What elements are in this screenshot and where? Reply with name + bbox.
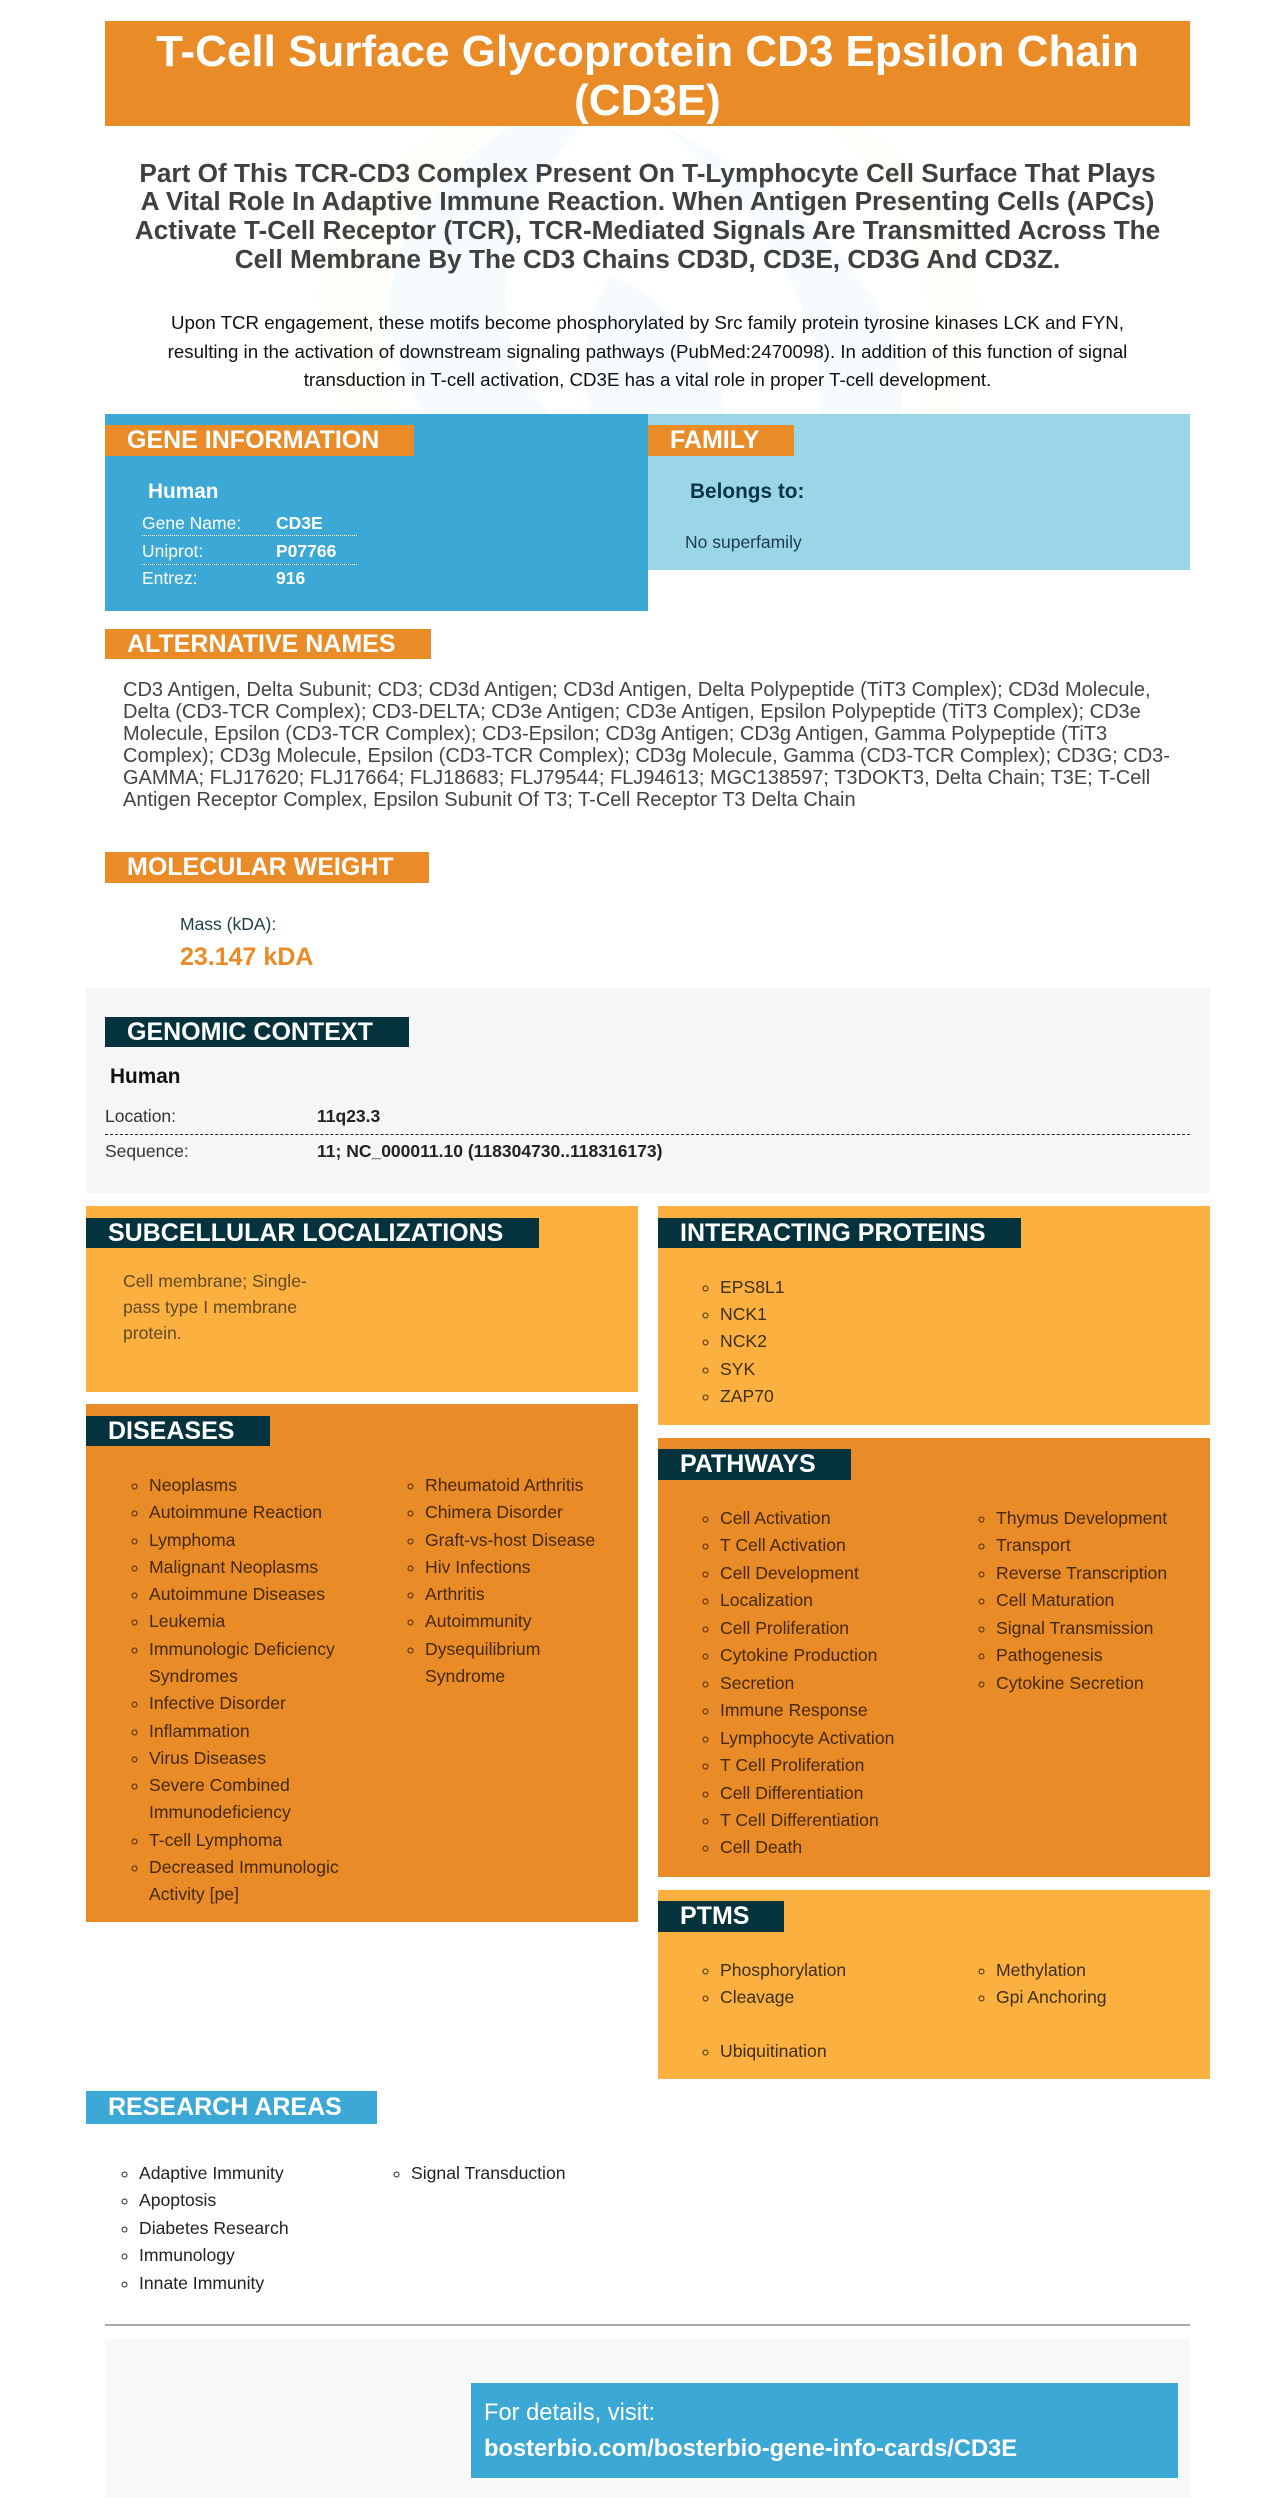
heading: pathways: PATHWAYS [680,1450,816,1478]
alternative names text: Delta (CD3-TCR Complex); CD3-DELTA; CD3e Antigen; CD3e Antigen, Epsilon Polypeptide (TiT3 Complex); CD3e [123,701,1141,723]
disease list column 2: Hiv Infections [425,1557,531,1577]
pathway list column 1: T Cell Proliferation [720,1755,864,1775]
pathway list column 1: T Cell Activation [720,1535,846,1555]
disease list column 2: Graft-vs-host Disease [425,1530,595,1550]
gene name row: CD3E [276,513,323,533]
ptm list column 1: Ubiquitination [720,2041,827,2061]
pathway list column 2: Signal Transmission [996,1618,1153,1638]
subtitle summary: Cell Membrane By The CD3 Chains CD3D, CD3E, CD3G And CD3Z. [235,244,1060,274]
sequence row: 11; NC_000011.10 (118304730..118316173) [317,1141,662,1161]
pathway list column 1: T Cell Differentiation [720,1810,879,1830]
heading: diseases [86,1416,270,1446]
uniprot row [142,540,357,565]
title banner: (CD3E) [574,76,721,125]
research areas list column 1 [122,2163,289,2293]
disease list column 1: Neoplasms [149,1475,237,1495]
panel: pathways [658,1438,1210,1877]
alternative names text: Antigen Receptor Complex, Epsilon Subunit Of T3; T-Cell Receptor T3 Delta Chain [123,789,856,811]
pathway list column 1: Cell Differentiation [720,1783,863,1803]
heading: research areas [86,2091,377,2124]
pathway list column 1: Cytokine Production [720,1645,877,1665]
disease list column 2: Autoimmunity [425,1611,532,1631]
title banner: T-Cell Surface Glycoprotein CD3 Epsilon Chain [156,27,1139,76]
pathway list column 1: Cell Death [720,1837,802,1857]
subtitle summary [135,158,1160,274]
uniprot row: P07766 [276,541,336,561]
callout url: bosterbio.com/bosterbio-gene-info-cards/CD3E [484,2436,1017,2462]
localization text: Cell membrane; Single- [123,1271,307,1291]
heading: interacting proteins: INTERACTING PROTEINS [680,1219,986,1247]
pathway list column 2: Pathogenesis [996,1645,1103,1665]
pathway list column 1: Immune Response [720,1700,868,1720]
disease list column 1: Decreased Immunologic [149,1857,339,1877]
panel: gene information [105,414,648,611]
sequence row [105,1141,662,1161]
disease list column 1: Autoimmune Reaction [149,1502,322,1522]
ptm list column 2: Methylation [996,1960,1086,1980]
disease list column 2: Chimera Disorder [425,1502,563,1522]
pathway list column 1: Secretion [720,1673,794,1693]
intro paragraph: Upon TCR engagement, these motifs become phosphorylated by Src family protein tyrosine kinases LCK and FYN, [171,312,1124,333]
panel: ptms [658,1890,1210,2079]
heading: diseases: DISEASES [108,1417,234,1445]
interacting protein list [702,1276,785,1406]
heading: ptms [658,1901,784,1932]
localization text [123,1271,307,1343]
gene name row [142,512,357,536]
mass label: Mass (kDA): [180,914,276,934]
location row [105,1105,1190,1135]
interacting protein list: ZAP70 [720,1386,774,1406]
disease list column 2: Syndrome [425,1666,505,1686]
mass value: 23.147 kDA [180,943,313,971]
family value: No superfamily [685,532,802,552]
research areas list column 1: Adaptive Immunity [139,2163,284,2183]
pathway list column 1: Cell Proliferation [720,1618,849,1638]
pathway list column 1: Cell Development [720,1563,859,1583]
pathway list column 1: Lymphocyte Activation [720,1728,894,1748]
heading: gene information: GENE INFORMATION [127,426,379,454]
panel: subcellular localizations [86,1206,638,1392]
pathway list column 2: Cell Maturation [996,1590,1114,1610]
ptm list column 1 [702,1960,846,2061]
heading: research areas: RESEARCH AREAS [108,2093,342,2121]
heading: pathways [658,1449,851,1480]
intro paragraph: transduction in T-cell activation, CD3E has a vital role in proper T-cell development. [304,369,991,390]
pathway list column 2: Reverse Transcription [996,1563,1167,1583]
panel: family [648,414,1190,570]
subtitle summary: Activate T-Cell Receptor (TCR), TCR-Mediated Signals Are Transmitted Across The [135,215,1160,245]
alternative names text [123,679,1170,811]
research areas list column 1: Innate Immunity [139,2273,264,2293]
disease list column 1: Syndromes [149,1666,238,1686]
pathway list column 1 [702,1508,894,1857]
alternative names text: Molecule, Epsilon (CD3-TCR Complex); CD3-Epsilon; CD3g Antigen; CD3g Antigen, Gamma Polypeptide (TiT3 [123,723,1107,745]
entrez row [142,568,305,588]
disease list column 2: Arthritis [425,1584,485,1604]
subtitle summary: A Vital Role In Adaptive Immune Reaction. When Antigen Presenting Cells (APCs) [141,186,1154,216]
panel: genomic context [86,988,1210,1193]
disease list column 1: Virus Diseases [149,1748,266,1768]
disease list column 1: Malignant Neoplasms [149,1557,318,1577]
panel: footer [105,2339,1190,2498]
alternative names text: Complex); CD3g Molecule, Epsilon (CD3-TCR Complex); CD3g Molecule, Gamma (CD3-TCR Complex); CD3G; CD3- [123,745,1170,767]
location row: 11q23.3 [317,1106,380,1126]
uniprot row: Uniprot: [142,541,203,561]
interacting protein list: NCK1 [720,1304,767,1324]
research areas list column 1: Immunology [139,2245,235,2265]
interacting protein list: SYK [720,1359,755,1379]
location row: Location: [105,1106,176,1126]
pathway list column 2 [978,1508,1167,1693]
heading: family [648,425,794,456]
ptm list column 1: Cleavage [720,1987,794,2007]
entrez row: 916 [276,568,305,588]
background watermark logo [390,126,902,414]
callout: details link [471,2383,1178,2478]
disease list column 1: Lymphoma [149,1530,235,1550]
belongs to label: Belongs to: [690,480,804,503]
pathway list column 2: Thymus Development [996,1508,1167,1528]
disease list column 1: Immunodeficiency [149,1802,291,1822]
subtitle summary: Part Of This TCR-CD3 Complex Present On T-Lymphocyte Cell Surface That Plays [139,158,1156,188]
ptm list column 2 [978,1960,1107,2007]
disease list column 1: Immunologic Deficiency [149,1639,335,1659]
pathway list column 1: Localization [720,1590,813,1610]
ptm list column 1: Phosphorylation [720,1960,846,1980]
intro paragraph: resulting in the activation of downstream signaling pathways (PubMed:2470098). In addition of this function of signal [168,341,1127,362]
disease list column 1: Autoimmune Diseases [149,1584,325,1604]
heading: alternative names: ALTERNATIVE NAMES [127,630,396,658]
panel: interacting proteins [658,1206,1210,1425]
alternative names text: CD3 Antigen, Delta Subunit; CD3; CD3d Antigen; CD3d Antigen, Delta Polypeptide (TiT3 Complex); CD3d Molecule, [123,679,1151,701]
title banner [105,21,1190,126]
heading: molecular weight: MOLECULAR WEIGHT [127,853,394,881]
interacting protein list: NCK2 [720,1331,767,1351]
species label: Human [110,1065,180,1088]
panel: diseases [86,1404,638,1922]
disease list column 2 [408,1475,595,1686]
disease list column 1: Inflammation [149,1721,250,1741]
disease list column 1: T-cell Lymphoma [149,1830,282,1850]
disease list column 1: Severe Combined [149,1775,290,1795]
disease list column 1 [132,1475,339,1904]
species label: Human [148,480,218,503]
alternative names text: GAMMA; FLJ17620; FLJ17664; FLJ18683; FLJ79544; FLJ94613; MGC138597; T3DOKT3, Delta Chain; T3E; T-Cell [123,767,1150,789]
pathway list column 2: Cytokine Secretion [996,1673,1144,1693]
disease list column 2: Dysequilibrium [425,1639,540,1659]
localization text: protein. [123,1323,182,1343]
intro paragraph [168,312,1127,390]
disease list column 2: Rheumatoid Arthritis [425,1475,583,1495]
interacting protein list: EPS8L1 [720,1276,785,1296]
research areas list column 2: Signal Transduction [411,2163,566,2183]
callout label: For details, visit: [484,2400,655,2426]
entrez row: Entrez: [142,568,197,588]
heading: subcellular localizations: SUBCELLULAR LOCALIZATIONS [108,1219,503,1247]
heading: genomic context: GENOMIC CONTEXT [127,1018,373,1046]
sequence row: Sequence: [105,1141,189,1161]
heading: ptms: PTMS [680,1902,749,1930]
gene name row: Gene Name: [142,513,241,533]
disease list column 1: Infective Disorder [149,1693,286,1713]
disease list column 1: Leukemia [149,1611,225,1631]
pathway list column 1: Cell Activation [720,1508,831,1528]
disease list column 1: Activity [pe] [149,1884,239,1904]
research areas list column 1: Apoptosis [139,2190,216,2210]
ptm list column 2: Gpi Anchoring [996,1987,1107,2007]
pathway list column 2: Transport [996,1535,1071,1555]
research areas list column 1: Diabetes Research [139,2218,289,2238]
localization text: pass type I membrane [123,1297,297,1317]
heading: family: FAMILY [670,426,759,454]
